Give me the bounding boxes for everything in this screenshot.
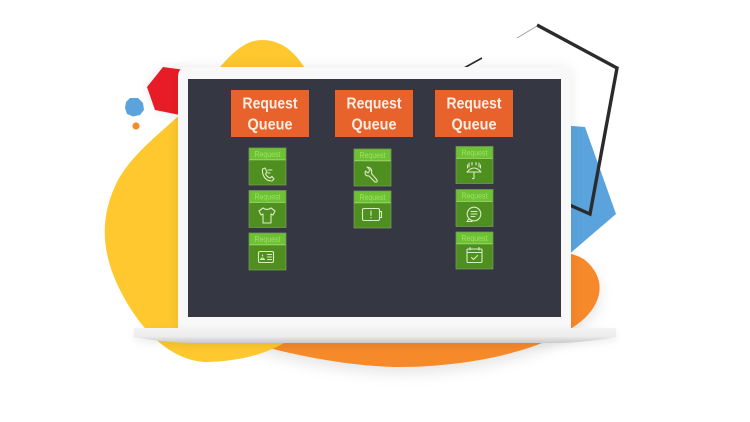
request card: calendar	[456, 232, 493, 269]
yellow blob	[105, 40, 320, 362]
queue heading 2	[335, 90, 413, 137]
request card: phone	[249, 148, 286, 185]
request card: speech bubble	[456, 190, 493, 226]
request card: umbrella: Request	[462, 148, 488, 158]
queue heading 3: Queue	[452, 116, 497, 134]
request card: battery: Request	[360, 192, 386, 202]
laptop base	[134, 328, 616, 343]
request card: umbrella	[456, 146, 493, 184]
request card: t-shirt	[249, 190, 286, 228]
laptop screen	[188, 79, 561, 317]
black polygon outline	[464, 25, 617, 214]
orange blob	[240, 252, 600, 367]
queue heading 1: Queue	[248, 116, 293, 134]
request card: wrench: Request	[360, 150, 386, 160]
red polygon	[147, 67, 185, 116]
queue heading 3: Request	[446, 96, 502, 112]
blue dot	[125, 98, 144, 116]
blue polygon	[560, 125, 616, 262]
request card: t-shirt: Request	[254, 192, 281, 202]
queue column 3	[435, 90, 513, 269]
queue heading 1: Request	[242, 96, 298, 112]
queue heading 3	[435, 90, 513, 137]
laptop	[134, 67, 616, 343]
queue heading 2: Request	[346, 96, 402, 112]
queue column 2	[335, 90, 413, 228]
request card: calendar: Request	[462, 233, 488, 243]
queue column 1	[231, 90, 309, 270]
request card: id card: Request	[254, 234, 281, 244]
queue heading 1	[231, 90, 309, 137]
laptop lid	[178, 67, 571, 332]
request card: speech bubble: Request	[462, 190, 488, 200]
request card: id card	[249, 233, 286, 270]
queue heading 2: Queue	[352, 116, 397, 134]
orange dot	[132, 122, 140, 130]
request card: phone: Request	[254, 149, 281, 159]
